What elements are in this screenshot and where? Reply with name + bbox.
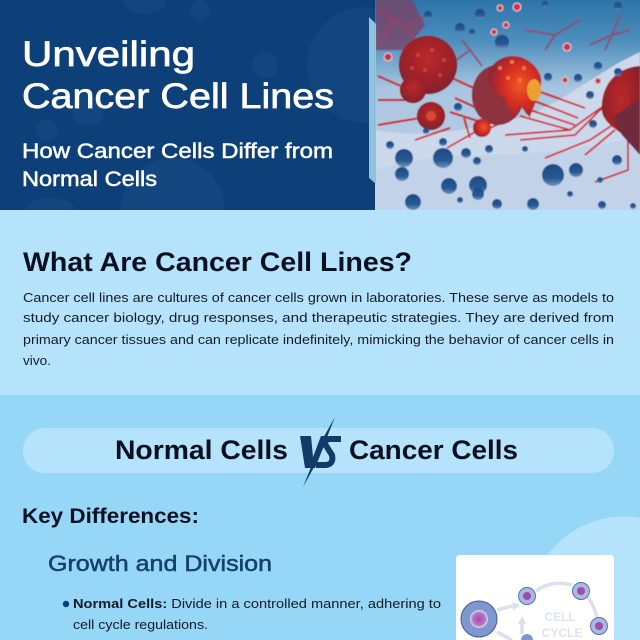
bullet: normal cells: Normal Cells: Divide in a controlled manner, adhering to [73, 596, 441, 611]
growth and division heading: Growth and Division [48, 551, 272, 576]
versus banner [23, 417, 614, 487]
decorative corner circle [529, 517, 640, 640]
intro paragraph [23, 290, 614, 368]
cancer cells [399, 36, 457, 94]
header image: cancer cells [375, 0, 640, 210]
cell icons [461, 601, 497, 637]
red tendrils [378, 76, 628, 182]
cell cycle label: CELL [544, 610, 576, 624]
intro paragraph: primary cancer tissues and can replicate indefinitely, mimicking the behavior of cancer cells in [23, 332, 614, 347]
key differences heading: Key Differences: [22, 505, 199, 528]
bullet: normal cells [63, 596, 441, 632]
versus banner: Cancer Cells [349, 435, 518, 465]
intro paragraph: vivo. [23, 353, 51, 368]
intro paragraph: study cancer biology, drug responses, and therapeutic strategies. They are derived from [23, 310, 614, 325]
cell cycle label [542, 610, 582, 640]
intro heading: What Are Cancer Cell Lines? [23, 247, 412, 277]
ground surface [376, 52, 640, 170]
subtitle [22, 140, 333, 191]
intro section [0, 210, 640, 395]
header banner [0, 0, 640, 210]
main title: Cancer Cell Lines [22, 77, 334, 116]
versus banner: Normal Cells [115, 435, 288, 465]
cell cycle label: CYCLE [542, 626, 582, 640]
icon: VS [300, 417, 341, 487]
bullet: normal cells: cell cycle regulations. [73, 617, 208, 632]
comparison section [0, 395, 640, 640]
subtitle: Normal Cells [22, 168, 157, 191]
blue spheres [386, 1, 636, 210]
cell cycle diagram [456, 555, 614, 640]
intro paragraph: Cancer cell lines are cultures of cancer cells grown in laboratories. These serve as models to [23, 290, 614, 305]
background tissue [376, 0, 425, 50]
subtitle: How Cancer Cells Differ from [22, 140, 333, 163]
main title: Unveiling [22, 35, 195, 74]
red spheres [384, 3, 601, 84]
image edge strip [369, 17, 376, 184]
main title [22, 35, 334, 116]
